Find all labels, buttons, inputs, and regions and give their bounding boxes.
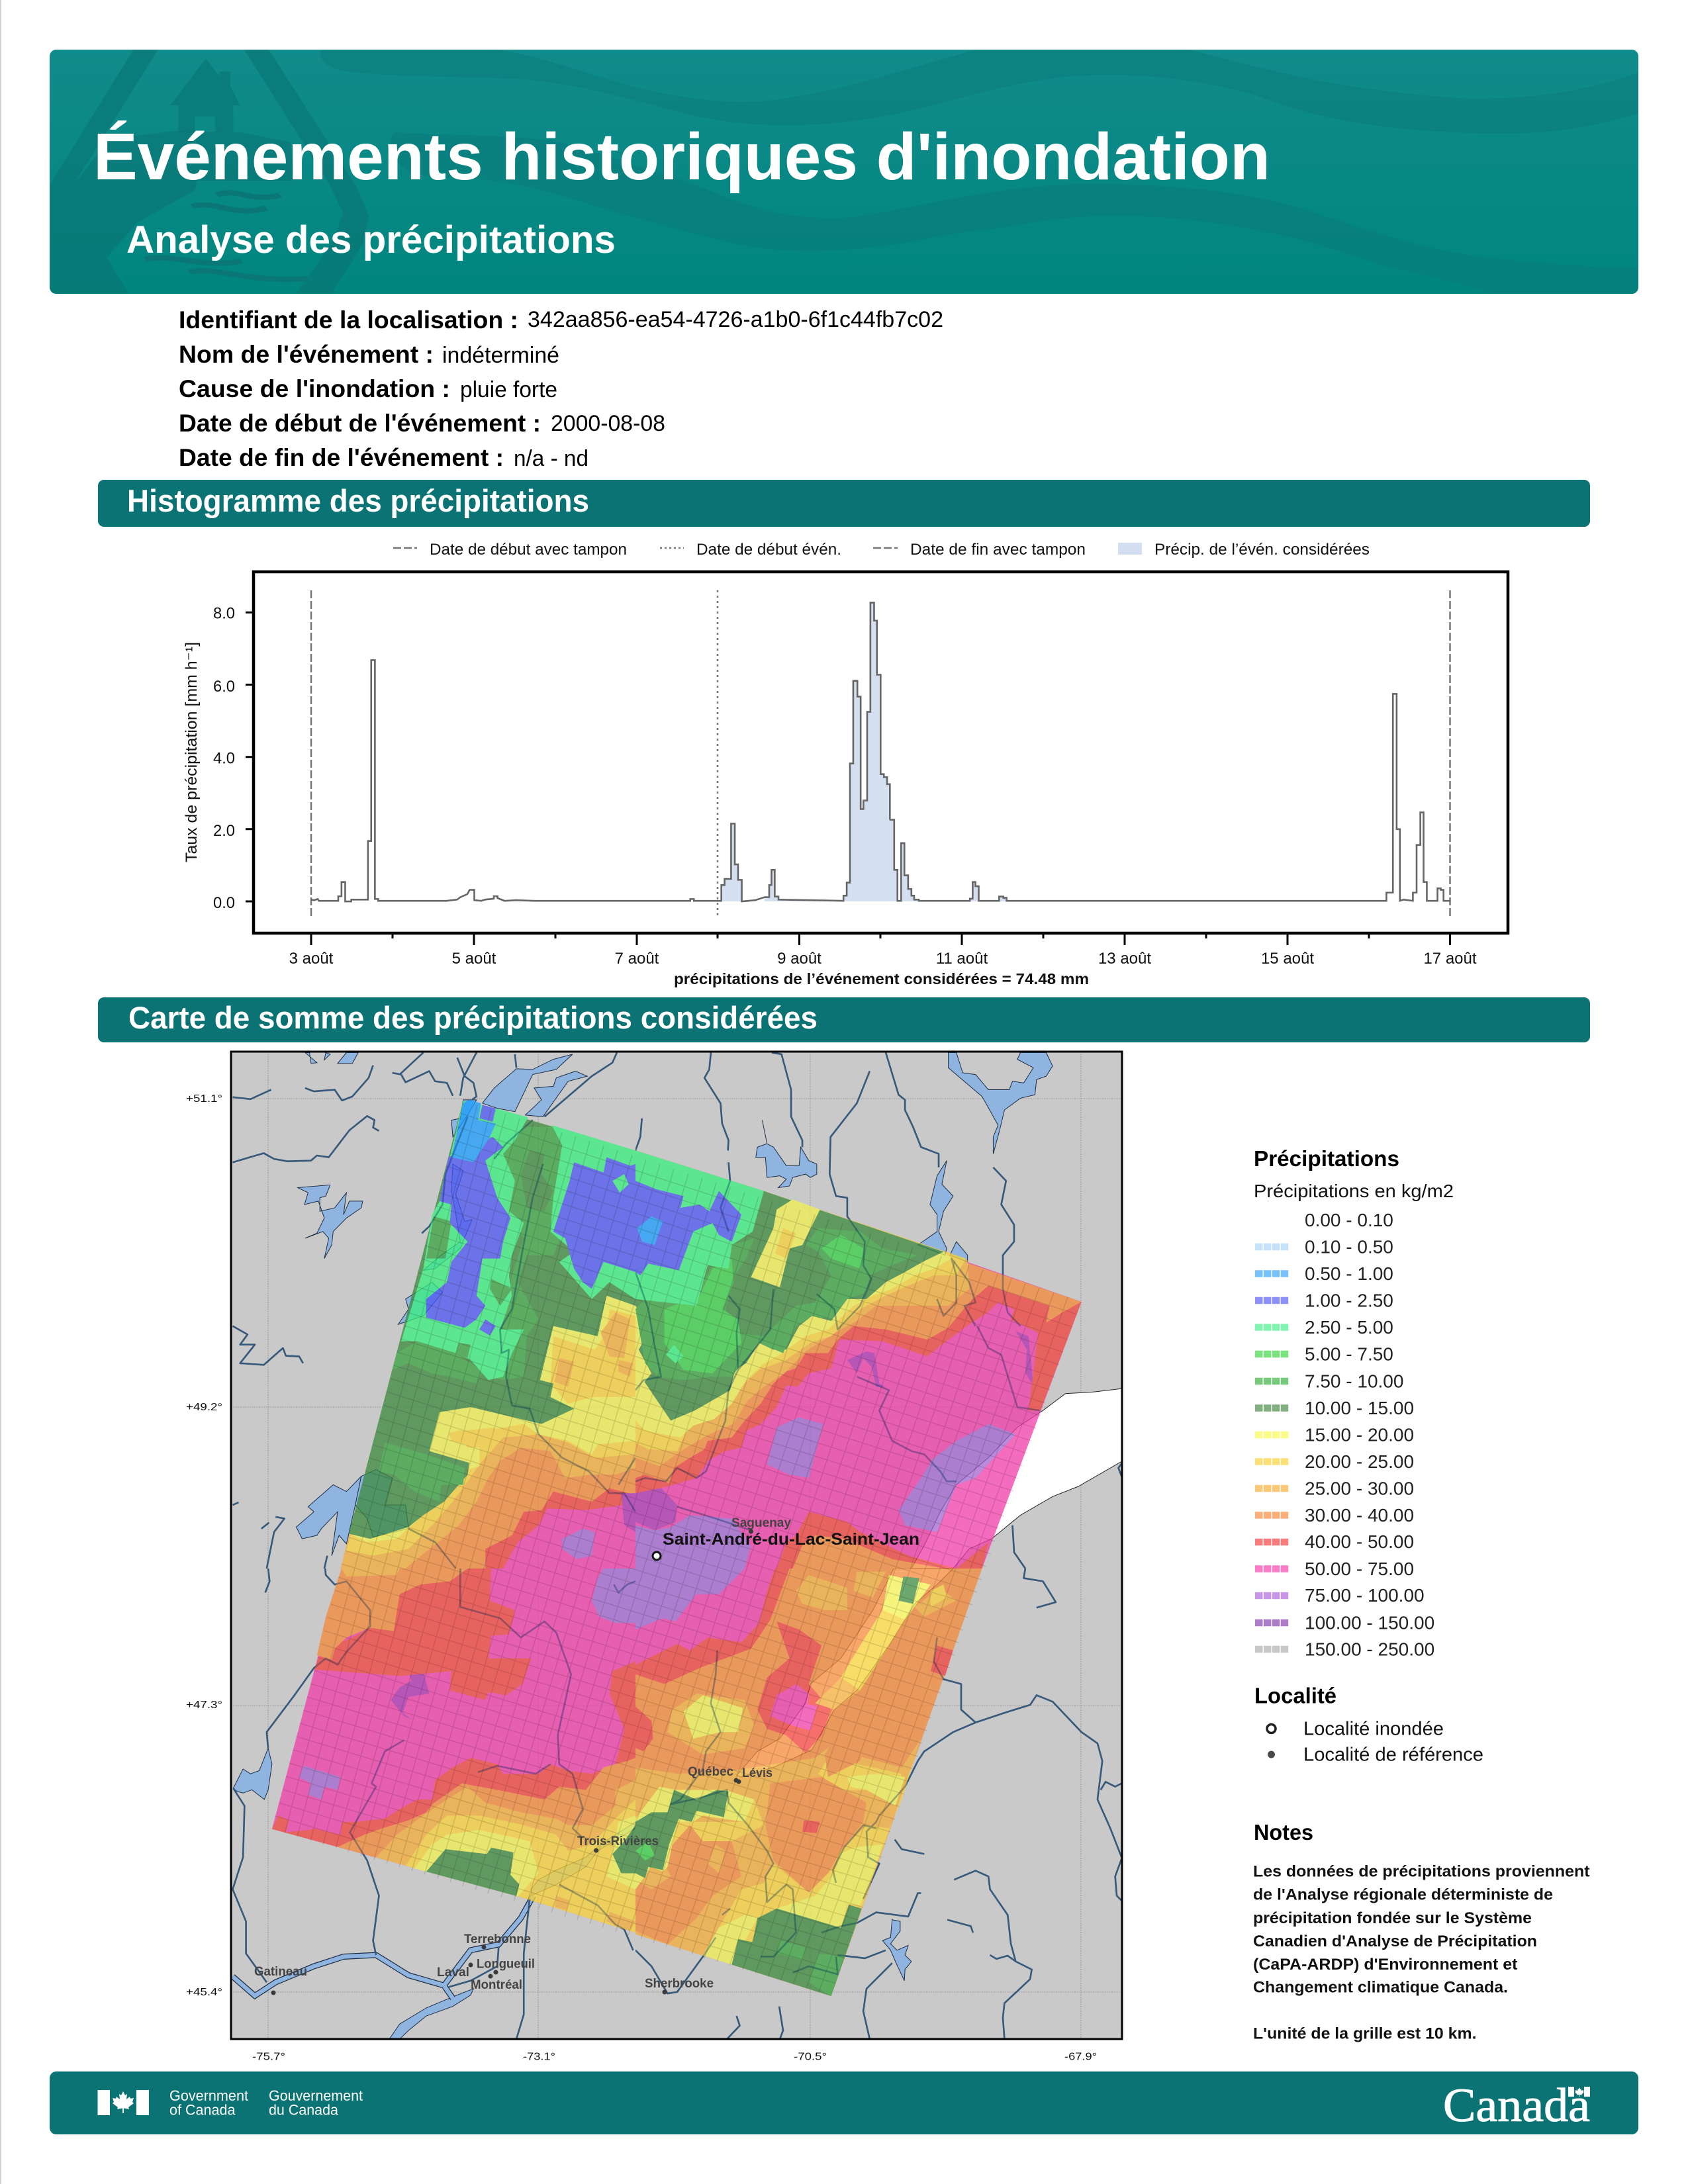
legend: precipitation classes: Précipitations — [1254, 1146, 1399, 1171]
event total annotation: précipitations de l’événement considérées = 74.48 mm — [674, 970, 1089, 987]
title: Événements historiques d'inondation — [93, 120, 1270, 194]
map latitude and longitude labels — [186, 1093, 1097, 2062]
legend: localities — [1254, 1684, 1483, 1766]
icon: Canadian flag signature — [98, 2090, 149, 2115]
event metadata block: n/a - nd — [514, 446, 588, 471]
legend: precipitation classes: 0.00 - 0.10 — [1305, 1210, 1393, 1230]
flooded locality marker and label — [653, 1530, 919, 1560]
map latitude and longitude labels: +49.2° — [186, 1402, 222, 1413]
event metadata block: indéterminé — [442, 343, 559, 368]
subtitle: Analyse des précipitations — [126, 218, 616, 261]
y axis labels: 6.0 — [213, 678, 235, 696]
section heading: histogram: Histogramme des précipitations — [127, 483, 589, 518]
x axis labels: 9 août — [777, 950, 821, 968]
legend: precipitation classes: 0.10 - 0.50 — [1305, 1236, 1393, 1257]
x axis labels: 15 août — [1261, 950, 1314, 968]
map latitude and longitude labels: -75.7° — [252, 2052, 285, 2062]
legend: precipitation classes: 50.00 - 75.00 — [1305, 1559, 1414, 1579]
chart legend: Précip. de l’évén. considérées — [1154, 541, 1370, 559]
map frame — [231, 1052, 1122, 2039]
legend: precipitation classes: 15.00 - 20.00 — [1305, 1424, 1414, 1445]
map latitude and longitude labels: -73.1° — [523, 2052, 555, 2062]
map panel: south-west — [232, 1569, 635, 2038]
reference city labels: Trois-Rivières — [577, 1835, 659, 1848]
map latitude and longitude labels: -67.9° — [1064, 2052, 1097, 2062]
chart legend — [393, 541, 1370, 559]
reference city labels: Québec — [688, 1765, 733, 1779]
reference city labels — [254, 1516, 791, 1995]
legend: precipitation classes: 5.00 - 7.50 — [1305, 1344, 1393, 1365]
legend: precipitation classes: 1.00 - 2.50 — [1305, 1291, 1393, 1311]
legend: precipitation classes: 75.00 - 100.00 — [1305, 1585, 1425, 1606]
event metadata block: pluie forte — [460, 377, 557, 402]
government wordmark: Gouvernement — [269, 2087, 363, 2104]
legend: precipitation classes: 2.50 - 5.00 — [1305, 1317, 1393, 1338]
event metadata block: Date de début de l'événement : — [179, 410, 541, 437]
reference city labels: Laval — [437, 1966, 469, 1979]
section heading: map: Carte de somme des précipitations considérées — [128, 1000, 818, 1035]
notes: Notes — [1254, 1820, 1313, 1844]
icon: house and flood emblem watermark — [50, 50, 369, 294]
event metadata block: Nom de l'événement : — [179, 341, 434, 368]
y axis labels: 8.0 — [213, 605, 235, 622]
legend: precipitation classes — [1254, 1146, 1454, 1660]
reference city labels: Terrebonne — [464, 1933, 531, 1946]
reference city labels: Sherbrooke — [645, 1977, 714, 1991]
y axis labels: 4.0 — [213, 750, 235, 768]
legend: precipitation classes: Précipitations en kg/m2 — [1254, 1181, 1454, 1201]
y axis labels — [213, 605, 235, 912]
x axis labels — [289, 950, 1477, 968]
axis ticks — [246, 612, 1450, 945]
event metadata block: Identifiant de la localisation : — [179, 306, 518, 334]
reference city labels: Montréal — [471, 1978, 522, 1992]
legend: precipitation classes: 40.00 - 50.00 — [1305, 1531, 1414, 1552]
chart frame — [254, 572, 1508, 933]
event metadata block — [179, 306, 943, 471]
map panel: north-west — [232, 1052, 635, 1569]
header wave bands — [320, 50, 1638, 294]
notes: de l'Analyse régionale déterministe de — [1253, 1886, 1553, 1903]
reference city labels: Lévis — [742, 1766, 773, 1780]
y axis labels: 0.0 — [213, 894, 235, 912]
notes: précipitation fondée sur le Système — [1253, 1909, 1532, 1927]
y axis labels: 2.0 — [213, 822, 235, 840]
map latitude and longitude labels: +45.4° — [186, 1987, 222, 1998]
legend: precipitation classes: 7.50 - 10.00 — [1305, 1371, 1403, 1391]
footer banner — [50, 2071, 1638, 2134]
map latitude and longitude labels: +51.1° — [186, 1093, 222, 1105]
map grid lines — [275, 1105, 1077, 1992]
x axis labels: 11 août — [936, 950, 988, 968]
event rainfall fill — [722, 603, 1007, 901]
legend: precipitation classes: 10.00 - 15.00 — [1305, 1398, 1414, 1418]
government wordmark: of Canada — [169, 2102, 236, 2118]
notes: (CaPA-ARDP) d'Environnement et — [1253, 1956, 1517, 1974]
notes — [1253, 1820, 1590, 2043]
legend: precipitation classes: 25.00 - 30.00 — [1305, 1479, 1414, 1499]
event metadata block: Date de fin de l'événement : — [179, 444, 504, 471]
notes: Changement climatique Canada. — [1253, 1979, 1508, 1997]
reference city labels: Gatineau — [254, 1965, 307, 1979]
x axis labels: 3 août — [289, 950, 334, 968]
buffer and event date lines — [311, 590, 1450, 917]
legend: localities: Localité — [1254, 1684, 1336, 1707]
event metadata block: Cause de l'inondation : — [179, 375, 450, 402]
map latitude and longitude labels: -70.5° — [794, 2052, 827, 2062]
x axis labels: 5 août — [452, 950, 496, 968]
x axis labels: 7 août — [615, 950, 659, 968]
precipitation histogram chart — [183, 572, 1508, 987]
legend: precipitation classes: 150.00 - 250.00 — [1305, 1639, 1434, 1660]
notes: Les données de précipitations proviennent — [1253, 1863, 1590, 1881]
rainfall step line — [311, 603, 1450, 901]
section heading: histogram — [98, 480, 1590, 527]
section heading: map — [98, 997, 1590, 1042]
map panel: north-east — [635, 1052, 1121, 1569]
legend: localities: Localité de référence — [1303, 1745, 1483, 1766]
header banner — [50, 50, 1638, 294]
legend: precipitation classes: 0.50 - 1.00 — [1305, 1263, 1393, 1284]
notes: Canadien d'Analyse de Précipitation — [1253, 1933, 1537, 1950]
legend: localities: Localité inondée — [1303, 1718, 1444, 1739]
reference city labels: Longueuil — [477, 1958, 535, 1971]
precipitation map — [186, 1052, 1122, 2062]
legend: precipitation classes: 30.00 - 40.00 — [1305, 1505, 1414, 1525]
government wordmark: du Canada — [269, 2102, 338, 2118]
chart legend: Date de début évén. — [696, 541, 841, 559]
notes: L'unité de la grille est 10 km. — [1253, 2025, 1476, 2043]
legend: precipitation classes: 100.00 - 150.00 — [1305, 1612, 1434, 1633]
x axis labels: 13 août — [1098, 950, 1151, 968]
map latitude and longitude labels: +47.3° — [186, 1700, 222, 1711]
x axis labels: 17 août — [1423, 950, 1477, 968]
chart legend: Date de fin avec tampon — [910, 541, 1086, 559]
event metadata block: 342aa856-ea54-4726-a1b0-6f1c44fb7c02 — [528, 307, 943, 332]
government wordmark — [169, 2087, 363, 2118]
chart legend: Date de début avec tampon — [430, 541, 627, 559]
flooded locality marker and label: Saint-André-du-Lac-Saint-Jean — [663, 1530, 919, 1549]
event metadata block: 2000-08-08 — [551, 411, 665, 436]
reference city labels: Saguenay — [731, 1516, 791, 1530]
y axis title: Taux de précipitation [mm h⁻¹] — [183, 642, 201, 862]
legend: precipitation classes: 20.00 - 25.00 — [1305, 1451, 1414, 1472]
government wordmark: Government — [169, 2087, 249, 2104]
map panel: south-east — [635, 1569, 1121, 2038]
Canada wordmark: Canada — [1443, 2079, 1590, 2132]
